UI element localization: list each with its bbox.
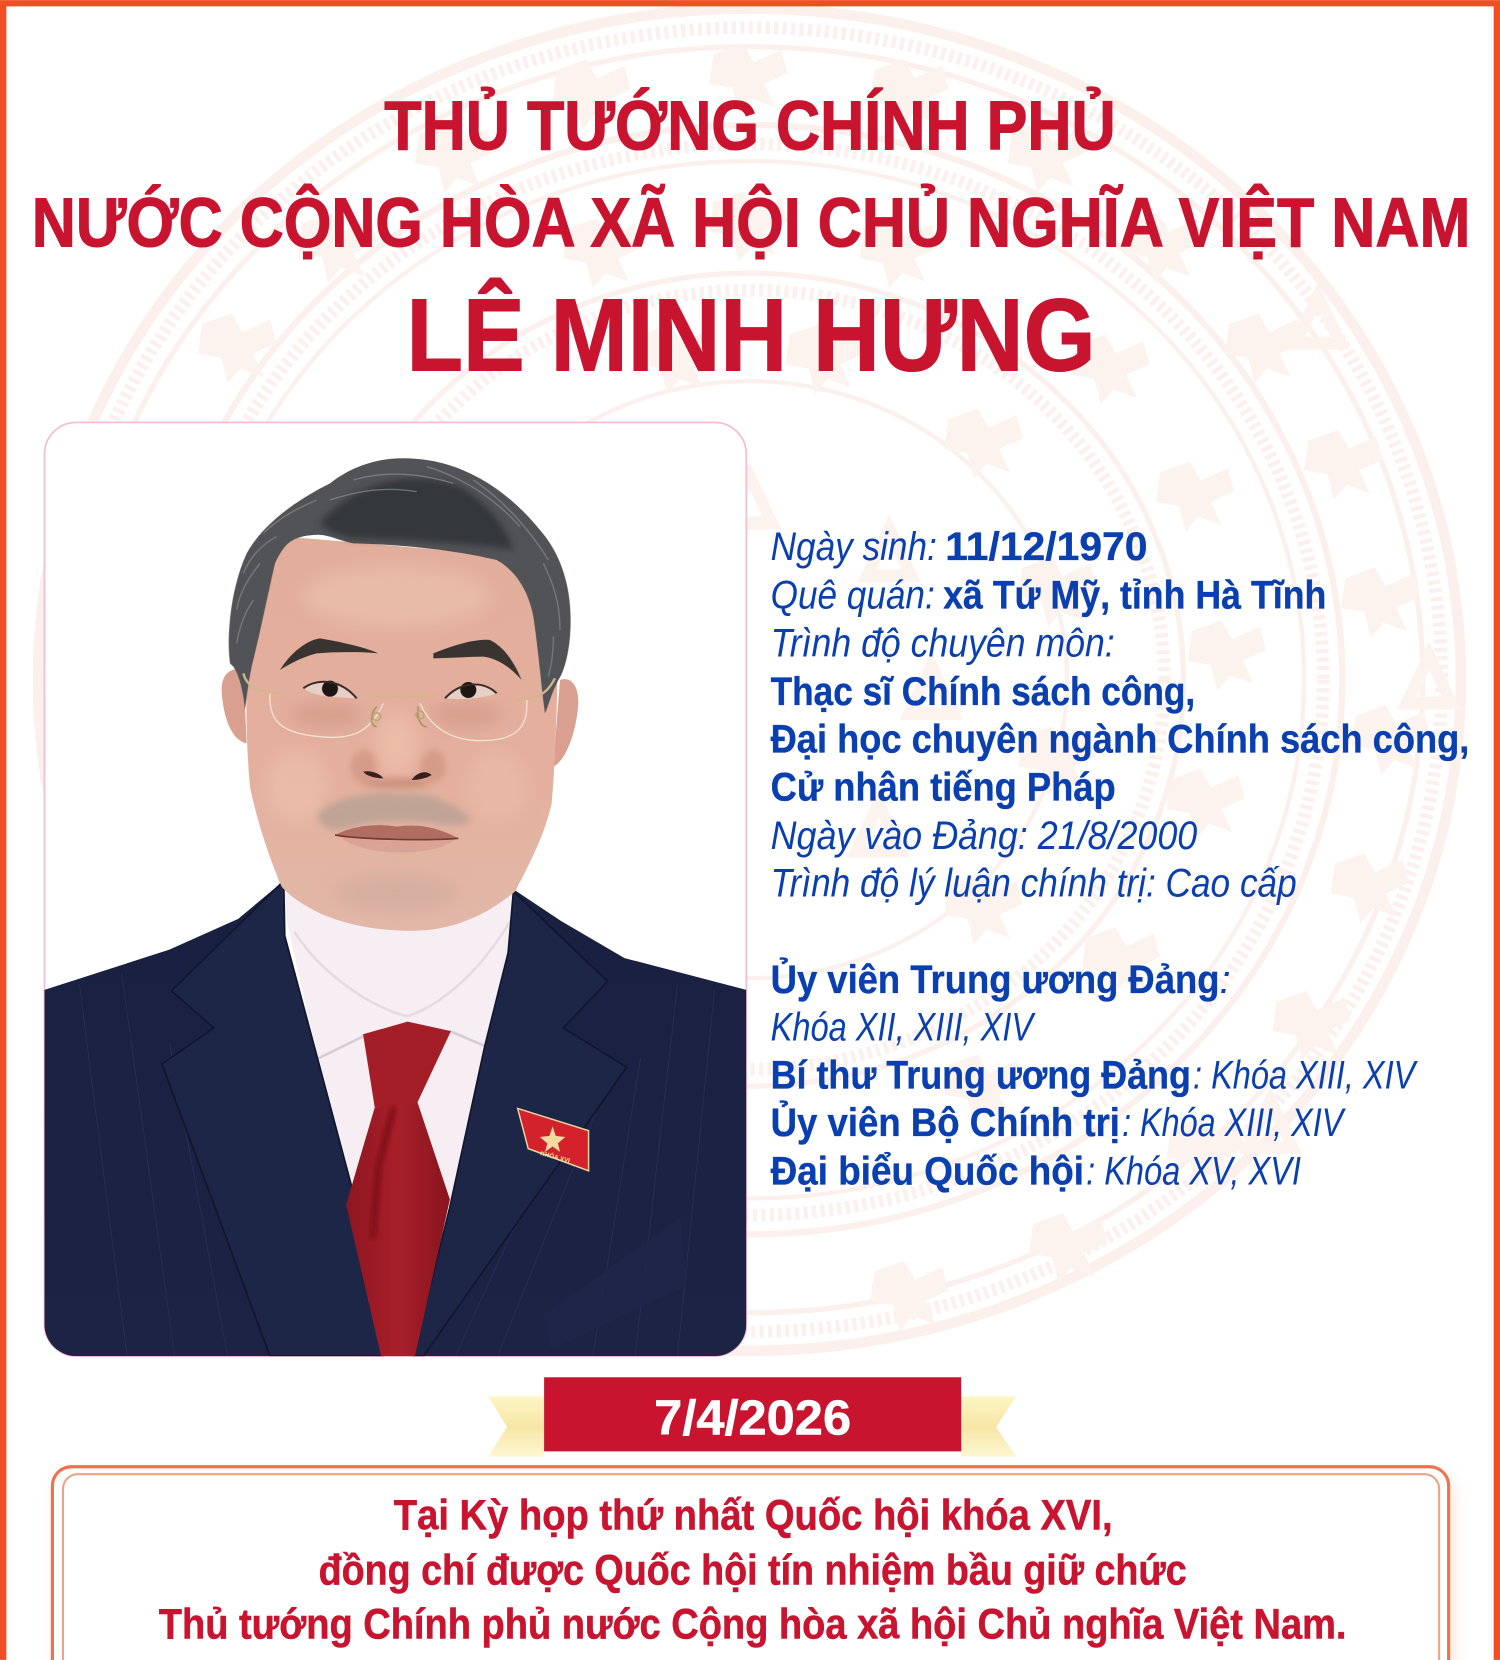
head xyxy=(222,458,578,931)
necktie xyxy=(346,1022,451,1356)
statement line 2: đồng chí được Quốc hội tín nhiệm bầu giữ chức xyxy=(319,1547,1187,1594)
political theory level: Trình độ lý luận chính trị: Cao cấp xyxy=(771,861,1297,906)
name: LÊ MINH HƯNG xyxy=(406,278,1096,393)
secretariat: : Khóa XIII, XIV xyxy=(1193,1052,1418,1097)
panel: portrait photo xyxy=(44,422,746,1356)
qualification 1: Thạc sĩ Chính sách công, xyxy=(771,669,1195,714)
biography text block xyxy=(771,524,1469,1194)
national assembly deputy xyxy=(771,1149,1301,1194)
face xyxy=(246,537,557,931)
date of birth xyxy=(771,524,1147,569)
lapels xyxy=(162,881,627,1356)
ears xyxy=(222,668,578,767)
dark hair patch xyxy=(320,478,513,550)
panel: election statement xyxy=(52,1467,1454,1660)
national assembly flag pin: KHÓA XVI xyxy=(539,1148,571,1165)
eyebrows xyxy=(280,638,522,680)
ribbon left tail xyxy=(488,1396,544,1457)
eyes xyxy=(303,681,497,699)
hair xyxy=(229,458,571,713)
national assembly deputy: : Khóa XV, XVI xyxy=(1086,1149,1301,1194)
central committee terms: Khóa XII, XIII, XIV xyxy=(771,1005,1036,1050)
central committee member: Ủy viên Trung ương Đảng xyxy=(771,956,1219,1002)
hometown: xã Tứ Mỹ, tỉnh Hà Tĩnh xyxy=(943,573,1326,618)
background: faint bronze drum motif xyxy=(38,9,1461,1351)
party admission date: Ngày vào Đảng: 21/8/2000 xyxy=(771,813,1198,858)
ribbon band xyxy=(544,1377,961,1451)
hair grey streaks xyxy=(237,467,560,677)
ribbon right tail xyxy=(961,1396,1016,1457)
hometown xyxy=(771,573,1326,618)
politburo xyxy=(771,1099,1346,1145)
politburo: Ủy viên Bộ Chính trị xyxy=(771,1099,1120,1145)
pocket xyxy=(544,1217,686,1350)
national assembly flag pin xyxy=(518,1108,589,1171)
statement line 1: Tại Kỳ họp thứ nhất Quốc hội khóa XVI, xyxy=(394,1492,1113,1539)
date: 7/4/2026 xyxy=(654,1391,851,1445)
date of birth: 11/12/1970 xyxy=(945,524,1147,569)
shirt xyxy=(277,879,519,1217)
qualification heading: Trình độ chuyên môn: xyxy=(771,620,1115,665)
suit jacket xyxy=(44,881,746,1356)
statement line 3: Thủ tướng Chính phủ nước Cộng hòa xã hội Chủ nghĩa Việt Nam. xyxy=(159,1601,1347,1648)
title line 1: THỦ TƯỚNG CHÍNH PHỦ xyxy=(384,85,1116,164)
face shading xyxy=(267,567,527,913)
qualification 3: Cử nhân tiếng Pháp xyxy=(771,764,1116,809)
hometown: Quê quán: xyxy=(771,573,935,618)
secretariat: Bí thư Trung ương Đảng xyxy=(771,1052,1191,1097)
nose xyxy=(351,750,446,789)
moustache xyxy=(318,793,472,830)
jacket pinstripes xyxy=(79,974,715,1356)
mouth xyxy=(335,825,458,853)
title xyxy=(32,85,1470,393)
date of birth: Ngày sinh: xyxy=(771,524,937,569)
collar fold shadows xyxy=(294,921,510,1059)
central committee member: : xyxy=(1219,957,1231,1002)
politburo: : Khóa XIII, XIV xyxy=(1122,1100,1346,1145)
national assembly deputy: Đại biểu Quốc hội xyxy=(771,1149,1084,1194)
rimless glasses xyxy=(243,673,555,741)
date ribbon xyxy=(488,1377,1016,1457)
